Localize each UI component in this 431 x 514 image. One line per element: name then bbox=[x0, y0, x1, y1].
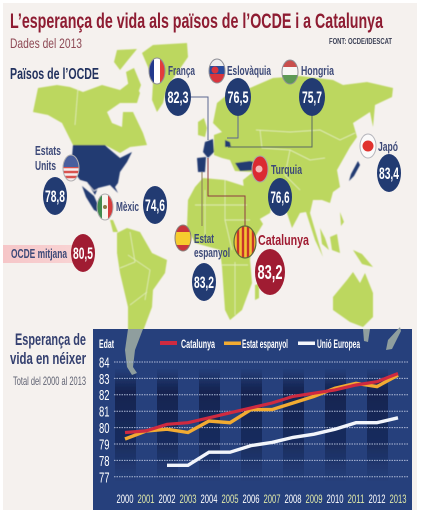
callout: Japó: 83,4 bbox=[379, 164, 399, 183]
callout: Japó bbox=[360, 134, 401, 192]
map continuation inside chart bbox=[125, 327, 401, 375]
y axis: 77 bbox=[99, 470, 110, 486]
callout: Turquia bbox=[252, 156, 303, 216]
y axis: 79 bbox=[99, 436, 110, 454]
legend: Estat espanyol bbox=[242, 337, 288, 351]
callout: França: 82,3 bbox=[168, 88, 188, 107]
callout: Mèxic bbox=[97, 186, 167, 224]
y axis: 84 bbox=[99, 354, 110, 372]
callout: Japó: Japó bbox=[378, 139, 398, 154]
callout: OCDE mitjana: OCDE mitjana bbox=[11, 246, 67, 261]
x axis: 2009 bbox=[306, 492, 323, 506]
x axis: 2001 bbox=[138, 492, 155, 506]
subtitle: Dades del 2013 bbox=[10, 35, 82, 51]
callout: França: França bbox=[168, 63, 195, 78]
callout: Estat espanyol bbox=[175, 225, 230, 301]
callout: Estat espanyol: Estat bbox=[194, 231, 214, 246]
x axis: 2006 bbox=[242, 492, 260, 506]
callout: Catalunya: 83,2 bbox=[258, 262, 282, 284]
callout: França bbox=[149, 58, 195, 116]
x axis: 2008 bbox=[284, 492, 302, 506]
line: Estat espanyol bbox=[125, 375, 398, 439]
x axis: 2002 bbox=[158, 492, 176, 506]
line chart panel bbox=[93, 327, 412, 510]
callout: Estats Units: Estats bbox=[35, 143, 61, 158]
chart heading: vida en néixer bbox=[10, 349, 86, 368]
x axis: 2005 bbox=[222, 492, 239, 506]
callout: Mèxic: Mèxic bbox=[116, 199, 139, 214]
callout: Hongria: 75,7 bbox=[302, 88, 322, 107]
y axis: 81 bbox=[99, 404, 110, 420]
callout: Catalunya bbox=[234, 226, 309, 295]
legend: Catalunya bbox=[181, 337, 215, 351]
callout: Eslovàquia bbox=[208, 58, 271, 116]
callout: Hongria bbox=[281, 59, 335, 116]
land masses bbox=[33, 43, 393, 331]
callout: Estat espanyol: 83,2 bbox=[194, 273, 214, 292]
y axis: 80 bbox=[99, 420, 110, 437]
callout: Eslovàquia: Eslovàquia bbox=[227, 63, 271, 78]
map heading: Països de l’OCDE bbox=[10, 66, 99, 83]
chart heading bbox=[10, 330, 86, 388]
connector lines bbox=[191, 97, 312, 226]
x axis: 2007 bbox=[264, 492, 281, 506]
OCDE countries in navy bbox=[72, 139, 360, 216]
country borders bbox=[75, 88, 355, 315]
callout: Turquia: 76,6 bbox=[270, 188, 290, 207]
x axis: 2003 bbox=[180, 492, 197, 506]
chart heading: Total del 2000 al 2013 bbox=[13, 374, 86, 388]
axis title: Edat bbox=[99, 337, 114, 351]
line: Unió Europea bbox=[167, 418, 398, 465]
line: Catalunya bbox=[125, 374, 398, 432]
callout: Turquia: Turquia bbox=[271, 162, 303, 177]
callout: Hongria: Hongria bbox=[301, 63, 335, 78]
y axis: 83 bbox=[99, 371, 110, 388]
callout: Estats Units: 78,8 bbox=[45, 187, 65, 206]
callout: Catalunya: Catalunya bbox=[258, 232, 309, 249]
x axis: 2000 bbox=[116, 492, 134, 506]
world map bbox=[33, 43, 393, 331]
chart heading: Esperança de bbox=[15, 330, 86, 349]
x axis: 2013 bbox=[390, 492, 407, 506]
source: FONT: OCDE/IDESCAT bbox=[329, 37, 392, 46]
legend: Unió Europea bbox=[317, 337, 360, 351]
x axis: 2010 bbox=[326, 492, 344, 506]
x axis: 2012 bbox=[368, 492, 386, 506]
grid lines bbox=[114, 362, 408, 477]
callout: Mèxic: 74,6 bbox=[145, 196, 165, 215]
callout: Estats Units: Units bbox=[35, 158, 56, 173]
x axis bbox=[116, 492, 407, 506]
y axis: 78 bbox=[99, 453, 110, 470]
callout: Estat espanyol: espanyol bbox=[194, 245, 230, 260]
y axis bbox=[99, 354, 110, 486]
title block bbox=[10, 10, 392, 83]
x axis: 2004 bbox=[200, 492, 218, 506]
callout: Eslovàquia: 76,5 bbox=[228, 88, 248, 107]
callout: OCDE mitjana bbox=[3, 234, 95, 272]
alternate columns bbox=[115, 368, 388, 483]
callout: Estats Units bbox=[35, 143, 80, 215]
legend bbox=[160, 337, 360, 351]
callout: OCDE mitjana: 80,5 bbox=[73, 244, 93, 263]
x axis: 2011 bbox=[348, 492, 365, 506]
y axis: 82 bbox=[99, 387, 110, 404]
